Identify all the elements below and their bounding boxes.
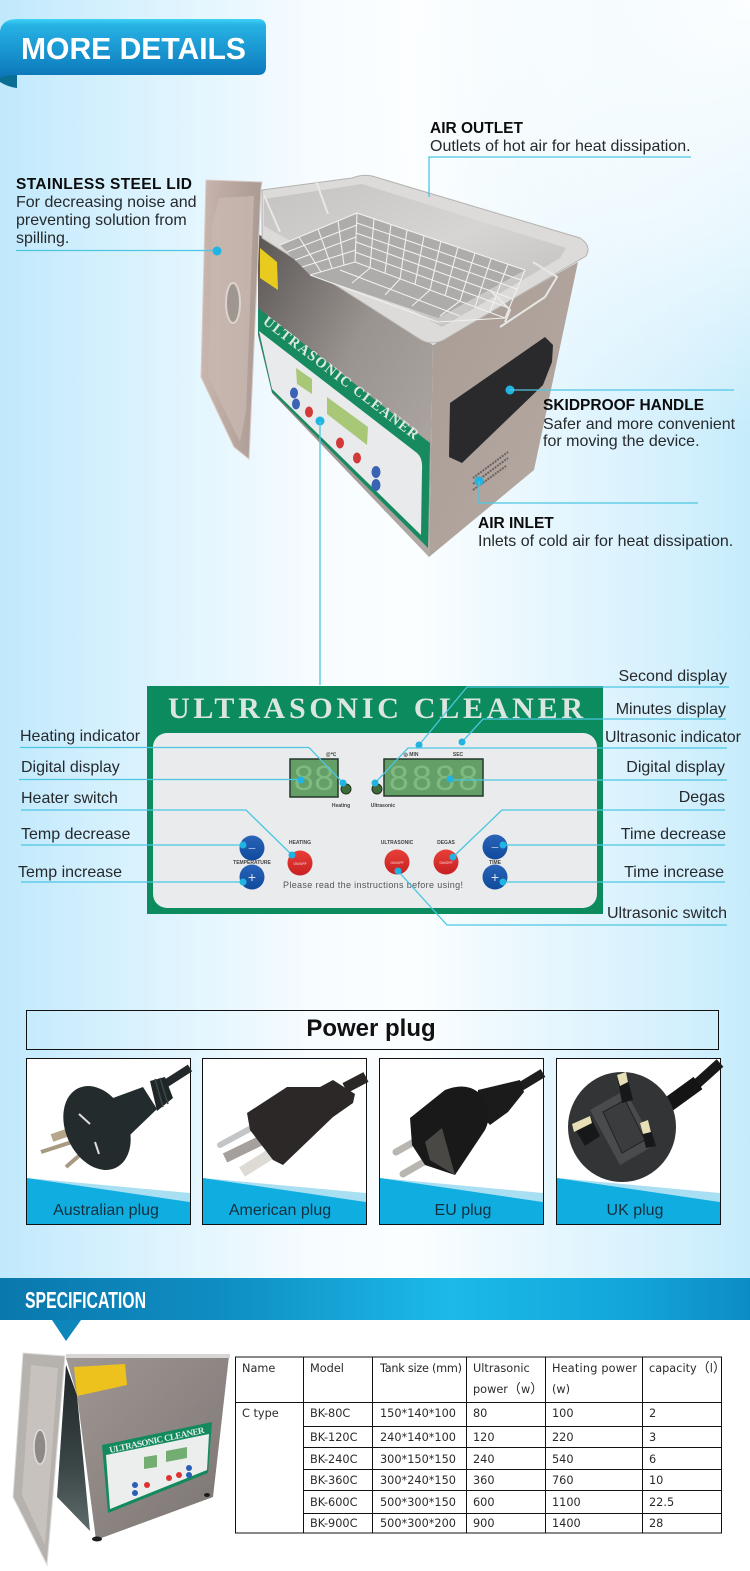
product photo: ultrasonic cleaner with open lid xyxy=(201,175,588,557)
temperature buttons xyxy=(240,836,264,890)
panel title: ULTRASONIC CLEANER xyxy=(168,692,583,725)
open lid xyxy=(13,1353,65,1565)
plug card: EU xyxy=(380,1058,544,1224)
callout: stainless steel lid: spilling. xyxy=(16,230,69,247)
table rows: 600 xyxy=(473,1496,495,1509)
plug card: American xyxy=(202,1058,366,1224)
red switches: ON/OFF xyxy=(439,861,453,865)
plug card: EU: EU plug xyxy=(435,1202,491,1219)
panel small print: TEMPERATURE xyxy=(233,860,272,866)
callout: air outlet xyxy=(429,120,691,197)
table rows: 900 xyxy=(473,1517,495,1530)
product photo: closed view xyxy=(13,1353,230,1565)
callout: air inlet: Inlets of cold air for heat dissipation. xyxy=(478,533,733,550)
table rows: BK-240C xyxy=(310,1453,358,1466)
callout: air inlet xyxy=(474,476,733,550)
callout: stainless steel lid: For decreasing noise and xyxy=(16,194,197,211)
temperature buttons: − xyxy=(248,840,256,856)
power plug heading box xyxy=(26,1010,718,1050)
panel small print xyxy=(233,751,502,890)
temperature display: 88 xyxy=(293,760,335,801)
callout: air outlet: AIR OUTLET xyxy=(430,120,524,137)
table rows: BK-600C xyxy=(310,1496,358,1509)
callout: stainless steel lid: STAINLESS STEEL LID xyxy=(16,176,192,193)
left panel labels: Temp increase xyxy=(18,864,122,881)
icon: UK plug xyxy=(568,1063,720,1182)
red switches: ON/OFF xyxy=(390,861,404,865)
callout: stainless steel lid: preventing solution from xyxy=(16,212,187,229)
callout: stainless steel lid xyxy=(16,176,222,256)
yellow warning label xyxy=(74,1364,127,1396)
table rows: 240 xyxy=(473,1453,495,1466)
green label: ULTRASONIC CLEANER xyxy=(108,1425,206,1455)
table header: Heating power xyxy=(552,1362,637,1375)
banner text: SPECIFICATION xyxy=(25,1287,146,1313)
plug card: Australian: Australian plug xyxy=(53,1202,159,1219)
left panel labels: Heating indicator xyxy=(20,728,141,745)
connector from tank label to control panel xyxy=(316,416,324,685)
panel small print: TIME xyxy=(489,860,502,866)
table rows: 240*140*100 xyxy=(380,1431,456,1444)
table rows: BK-360C xyxy=(310,1474,358,1487)
red switches: ON/OFF xyxy=(293,862,307,866)
specification banner xyxy=(0,1278,750,1341)
panel small print: Please read the instructions before using! xyxy=(283,880,463,890)
green control label: ULTRASONIC CLEANER xyxy=(260,313,422,443)
table rows: 760 xyxy=(552,1474,574,1487)
callout: skidproof handle: for moving the device. xyxy=(543,433,700,450)
right panel labels: Time decrease xyxy=(621,826,726,843)
yellow warning label xyxy=(260,248,278,290)
table rows: 100 xyxy=(552,1407,574,1420)
table rows: 6 xyxy=(649,1453,656,1466)
table rows: 1400 xyxy=(552,1517,581,1530)
table rows xyxy=(242,1407,674,1530)
open lid xyxy=(201,180,262,459)
table rows: 500*300*200 xyxy=(380,1517,456,1530)
basket hooks xyxy=(264,181,557,327)
specification table xyxy=(235,1357,726,1533)
tank rim xyxy=(262,175,588,343)
table header: Ultrasonic xyxy=(473,1362,530,1375)
right panel labels: Minutes display xyxy=(616,701,726,718)
left panel labels: Digital display xyxy=(21,759,120,776)
panel small print: @℃ xyxy=(326,751,337,758)
panel small print: ULTRASONIC xyxy=(381,840,414,846)
temperature buttons: + xyxy=(248,869,256,885)
right panel labels: Ultrasonic indicator xyxy=(605,729,742,746)
table header: (w) xyxy=(552,1383,570,1396)
table rows: 3 xyxy=(649,1431,656,1444)
table rows: 220 xyxy=(552,1431,574,1444)
panel small print: Heating xyxy=(332,803,350,809)
table rows: BK-900C xyxy=(310,1517,358,1530)
heading ribbon: more details xyxy=(0,19,266,88)
plug card: UK: UK plug xyxy=(607,1202,663,1219)
icon: American plug xyxy=(220,1077,366,1172)
front face xyxy=(66,1356,229,1540)
icon: Australian plug xyxy=(41,1068,190,1181)
table rows: 150*140*100 xyxy=(380,1407,456,1420)
table rows: C type xyxy=(242,1407,279,1420)
control panel xyxy=(147,686,603,914)
time display: 8888 xyxy=(388,760,479,801)
table rows: 28 xyxy=(649,1517,663,1530)
left panel labels xyxy=(18,728,346,886)
left panel labels: Heater switch xyxy=(21,790,118,807)
right panel labels: Ultrasonic switch xyxy=(607,905,727,922)
table rows: BK-80C xyxy=(310,1407,350,1420)
dark side interior xyxy=(57,1365,90,1531)
tank right face xyxy=(429,262,578,557)
table rows: 300*240*150 xyxy=(380,1474,456,1487)
green label xyxy=(102,1422,212,1513)
plug card: UK xyxy=(556,1058,720,1224)
plug card: American: American plug xyxy=(229,1202,331,1219)
table rows: 300*150*150 xyxy=(380,1453,456,1466)
table header: Model xyxy=(310,1362,344,1375)
time buttons: + xyxy=(491,869,499,885)
time buttons: − xyxy=(491,839,499,855)
panel small print: ◎ MIN xyxy=(404,752,419,758)
table header: Tank size (mm) xyxy=(379,1362,462,1375)
panel small print: HEATING xyxy=(289,840,311,846)
time buttons xyxy=(482,834,508,890)
callout: skidproof handle: SKIDPROOF HANDLE xyxy=(543,397,704,414)
power plug heading box: Power plug xyxy=(306,1015,436,1042)
panel small print: DEGAS xyxy=(437,840,456,846)
table rows: 540 xyxy=(552,1453,574,1466)
left panel labels: Temp decrease xyxy=(21,826,130,843)
table rows: 10 xyxy=(649,1474,663,1487)
skidproof handle xyxy=(449,337,553,463)
table rows: 2 xyxy=(649,1407,656,1420)
right panel labels: Degas xyxy=(679,789,725,806)
callout: skidproof handle: Safer and more convenient xyxy=(543,416,736,433)
table header xyxy=(242,1357,726,1397)
right panel labels: Second display xyxy=(618,668,727,685)
air vents xyxy=(473,452,508,490)
table header: Name xyxy=(242,1362,275,1375)
table rows: BK-120C xyxy=(310,1431,358,1444)
callout: skidproof handle xyxy=(506,386,736,450)
right panel labels: Digital display xyxy=(626,759,725,776)
wire basket xyxy=(280,213,525,322)
heading text: MORE DETAILS xyxy=(21,31,246,66)
table header: capacity（l） xyxy=(649,1357,726,1376)
table rows: 500*300*150 xyxy=(380,1496,456,1509)
table rows: 22.5 xyxy=(649,1496,674,1509)
callout: air inlet: AIR INLET xyxy=(478,515,554,532)
table header: power（w） xyxy=(473,1378,543,1397)
right panel labels: Time increase xyxy=(624,864,724,881)
icon: EU plug xyxy=(396,1073,543,1175)
table rows: 80 xyxy=(473,1407,487,1420)
panel small print: SEC xyxy=(453,752,464,758)
tank interior xyxy=(264,184,566,327)
feet xyxy=(92,1493,210,1542)
red switches xyxy=(288,850,458,876)
table rows: 120 xyxy=(473,1431,495,1444)
right panel labels xyxy=(372,668,742,925)
callout: air outlet: Outlets of hot air for heat dissipation. xyxy=(430,138,691,155)
indicator lamps xyxy=(341,784,382,794)
plug card: Australian xyxy=(26,1058,190,1224)
table rows: 360 xyxy=(473,1474,495,1487)
table rows: 1100 xyxy=(552,1496,581,1509)
green control label xyxy=(258,308,430,548)
tank left face xyxy=(258,234,433,557)
panel small print: Ultrasonic xyxy=(371,803,395,809)
